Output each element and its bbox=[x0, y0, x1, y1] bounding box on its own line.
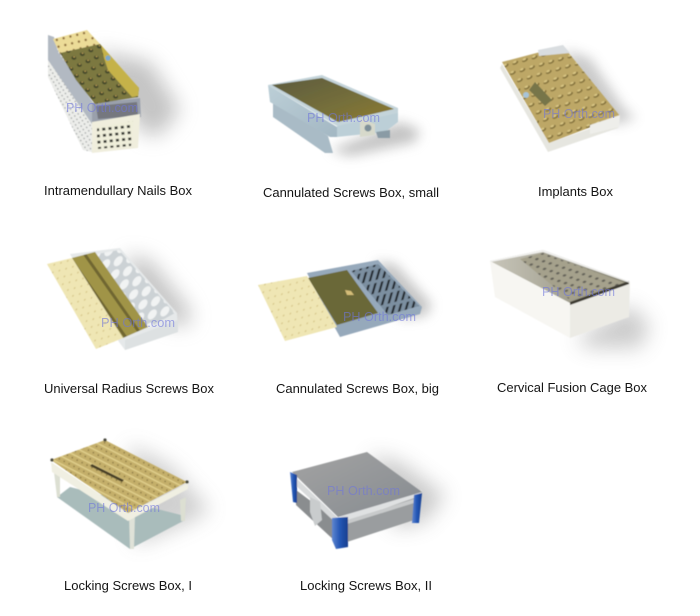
watermark: PH Orth.com bbox=[542, 285, 615, 299]
box illustration bbox=[50, 438, 189, 549]
shadow bbox=[95, 50, 180, 135]
panel: Locking Screws Box, II bbox=[290, 452, 445, 593]
label: Universal Radius Screws Box bbox=[44, 382, 215, 396]
watermark: PH Orth.com bbox=[327, 484, 400, 498]
box illustration bbox=[490, 250, 630, 338]
shadow bbox=[565, 50, 636, 125]
watermark: PH Orth.com bbox=[101, 316, 175, 330]
panel: Implants Box bbox=[500, 45, 636, 199]
panel: Intramendullary Nails Box bbox=[44, 30, 193, 198]
panel: Cervical Fusion Cage Box bbox=[490, 250, 650, 395]
box illustration bbox=[268, 75, 398, 153]
shadow bbox=[330, 122, 420, 156]
label: Cervical Fusion Cage Box bbox=[497, 381, 648, 395]
label: Intramendullary Nails Box bbox=[44, 184, 193, 198]
panel: Universal Radius Screws Box bbox=[44, 248, 215, 396]
label: Cannulated Screws Box, small bbox=[263, 186, 439, 200]
panel: Cannulated Screws Box, small bbox=[263, 75, 439, 200]
box illustration bbox=[48, 30, 141, 153]
label: Implants Box bbox=[538, 185, 614, 199]
box illustration bbox=[290, 452, 422, 549]
box illustration bbox=[47, 248, 178, 350]
shadow bbox=[130, 445, 210, 545]
label: Locking Screws Box, II bbox=[300, 579, 432, 593]
label: Locking Screws Box, I bbox=[64, 579, 192, 593]
watermark: PH Orth.com bbox=[66, 101, 138, 115]
panel: Cannulated Screws Box, big bbox=[258, 260, 439, 396]
panel: Locking Screws Box, I bbox=[50, 438, 210, 593]
shadow bbox=[375, 262, 432, 318]
watermark: PH Orth.com bbox=[307, 111, 380, 125]
watermark: PH Orth.com bbox=[88, 501, 160, 515]
shadow bbox=[125, 255, 190, 325]
watermark: PH Orth.com bbox=[543, 107, 615, 121]
box illustration bbox=[500, 45, 620, 152]
watermark: PH Orth.com bbox=[343, 310, 416, 324]
shadow bbox=[370, 455, 445, 528]
label: Cannulated Screws Box, big bbox=[276, 382, 439, 396]
box illustration bbox=[258, 260, 422, 341]
shadow bbox=[575, 305, 650, 348]
